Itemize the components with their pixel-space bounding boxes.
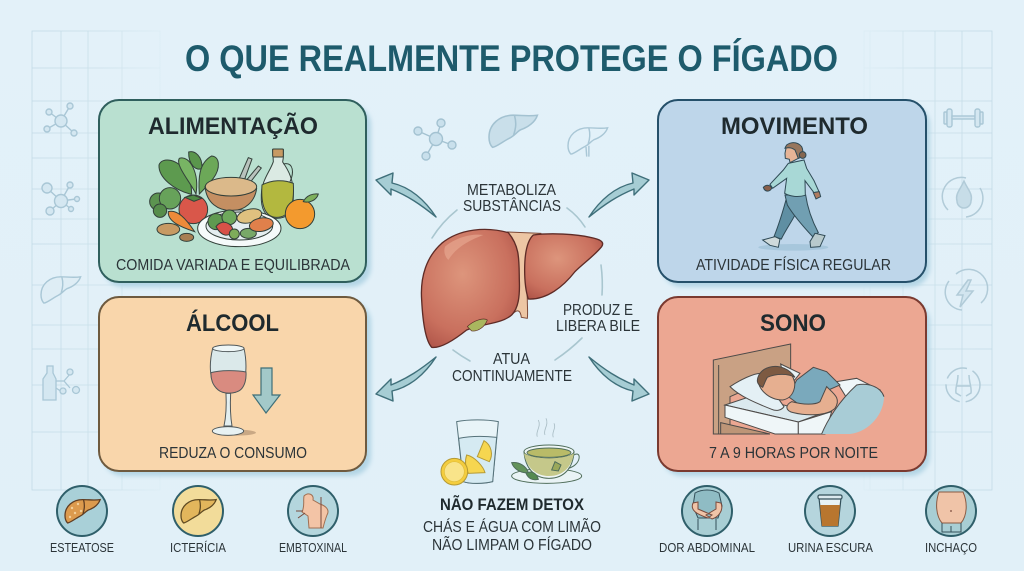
- heading: sono: SONO: [760, 310, 826, 337]
- icon: dor abdominal: [682, 486, 732, 536]
- icon: filled liver top center: [489, 115, 537, 147]
- caption: alimentação: COMIDA VARIADA E EQUILIBRADA: [116, 257, 350, 274]
- panel: álcool: [99, 297, 371, 476]
- panel: sono: [658, 297, 930, 476]
- liver right lobe: [525, 234, 603, 299]
- panel: alimentação: [99, 100, 371, 287]
- arrow: bottom left: [376, 357, 436, 401]
- heading: álcool: ÁLCOOL: [186, 309, 279, 337]
- arrow: bottom right: [589, 357, 649, 401]
- arrow: top right: [589, 173, 649, 217]
- icon: embtoxinal: [288, 486, 338, 536]
- callout: não fazem detox: NÃO FAZEM DETOX: [440, 494, 584, 514]
- icon: liver outline left: [41, 277, 81, 303]
- liver ligament: [507, 232, 541, 318]
- ring segments around the liver: [432, 208, 602, 361]
- icon: down arrow: [253, 368, 280, 413]
- icon: urina escura: [805, 486, 855, 536]
- icon: water cycle right: [942, 177, 983, 217]
- label: metaboliza substâncias: [463, 182, 561, 215]
- icon: molecule left 1: [44, 103, 77, 136]
- caption: movimento: ATIVIDADE FÍSICA REGULAR: [696, 255, 891, 274]
- label: esteatose: ESTEATOSE: [50, 540, 114, 555]
- icon: energy cycle right: [945, 269, 988, 310]
- label: dor abdominal: DOR ABDOMINAL: [659, 540, 755, 555]
- icon: molecule top center: [414, 119, 456, 160]
- callout: não fazem detox: NÃO LIMPAM O FÍGADO: [432, 534, 592, 554]
- arrow: top left: [376, 173, 436, 217]
- background grid: right: [864, 31, 992, 490]
- title: O QUE REALMENTE PROTEGE O FÍGADO: [185, 38, 838, 79]
- label: metaboliza substâncias: METABOLIZA: [467, 182, 556, 199]
- heading: movimento: MOVIMENTO: [721, 113, 868, 140]
- icon: bottle and molecule left: [43, 366, 80, 400]
- label: icterícia: ICTERÍCIA: [170, 540, 226, 555]
- label: metaboliza substâncias: SUBSTÂNCIAS: [463, 196, 561, 215]
- illustration: water glass with lemon: [441, 420, 498, 485]
- label: atua continuamente: [452, 351, 572, 385]
- liver left lobe: [421, 229, 519, 347]
- illustration: food: [150, 149, 318, 247]
- caption: sono: 7 A 9 HORAS POR NOITE: [709, 445, 878, 462]
- background grid: left: [32, 31, 160, 490]
- callout: não fazem detox: [423, 494, 601, 554]
- icon: dumbbell right: [944, 109, 983, 127]
- label: produz e libera bile: PRODUZ E: [563, 302, 633, 319]
- label: produz e libera bile: LIBERA BILE: [556, 318, 640, 335]
- icon: outline liver top center: [568, 128, 608, 157]
- label: atua continuamente: ATUA: [493, 351, 530, 368]
- icon: esteatose: [57, 486, 107, 536]
- liver highlight: [444, 235, 483, 260]
- illustration: tea cup: [512, 418, 582, 483]
- caption: álcool: REDUZA O CONSUMO: [159, 445, 307, 462]
- label: embtoxinal: EMBTOXINAL: [279, 540, 347, 555]
- label: produz e libera bile: [556, 302, 640, 335]
- label: atua continuamente: CONTINUAMENTE: [452, 368, 572, 385]
- illustration: liver: [421, 229, 603, 347]
- label: inchaço: INCHAÇO: [925, 540, 977, 555]
- heading: alimentação: ALIMENTAÇÃO: [148, 112, 318, 140]
- illustration: sleeping person: [713, 344, 884, 434]
- icon: icterícia: [173, 486, 223, 536]
- panel: movimento: [658, 100, 930, 287]
- icon: molecule left 2: [42, 182, 80, 215]
- icon: waist cycle right: [946, 368, 980, 402]
- illustration: walking person: [758, 143, 828, 251]
- icon: inchaço: [926, 486, 976, 536]
- gallbladder: [467, 319, 487, 331]
- illustration: wine glass: [210, 345, 256, 436]
- label: urina escura: URINA ESCURA: [788, 540, 873, 555]
- callout: não fazem detox: CHÁS E ÁGUA COM LIMÃO: [423, 516, 601, 536]
